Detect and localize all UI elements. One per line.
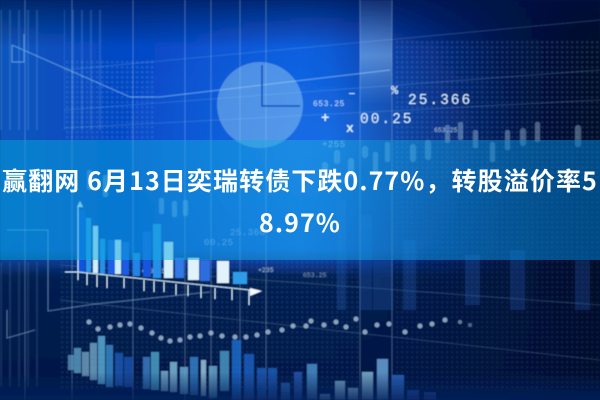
main bar chart [78, 210, 247, 284]
light beam [360, 0, 392, 140]
number labels [142, 84, 472, 279]
dot line series [86, 316, 472, 344]
number labels: – [348, 86, 356, 101]
number labels: +235 [258, 267, 274, 274]
pie circle [217, 62, 303, 148]
number labels: 25.366 [408, 93, 472, 109]
number labels: + [321, 111, 329, 127]
bottom fade [0, 372, 600, 400]
number labels: 00.25 [360, 112, 414, 128]
lower bar chart [68, 336, 436, 400]
number labels: +255 [322, 140, 346, 150]
number labels: x [346, 121, 354, 136]
number labels: 00.25 [204, 238, 234, 248]
title: 赢翻网 6月13日奕瑞转债下跌0.77%，转股溢价率5 [2, 162, 598, 198]
translucent title band [0, 140, 600, 260]
chart axis with flag arrow [65, 201, 262, 305]
candlesticks row upper [87, 122, 581, 217]
number labels: 653.25 [434, 127, 458, 134]
number labels: 653.25 [313, 100, 345, 109]
number labels: 653.25 [142, 268, 166, 275]
title: 8.97% [259, 204, 341, 240]
number labels: 25.366 [230, 228, 265, 238]
title [2, 162, 598, 240]
number labels: 653.25 [303, 272, 327, 279]
number labels: % [391, 84, 399, 98]
faint upper bars right [337, 200, 590, 310]
